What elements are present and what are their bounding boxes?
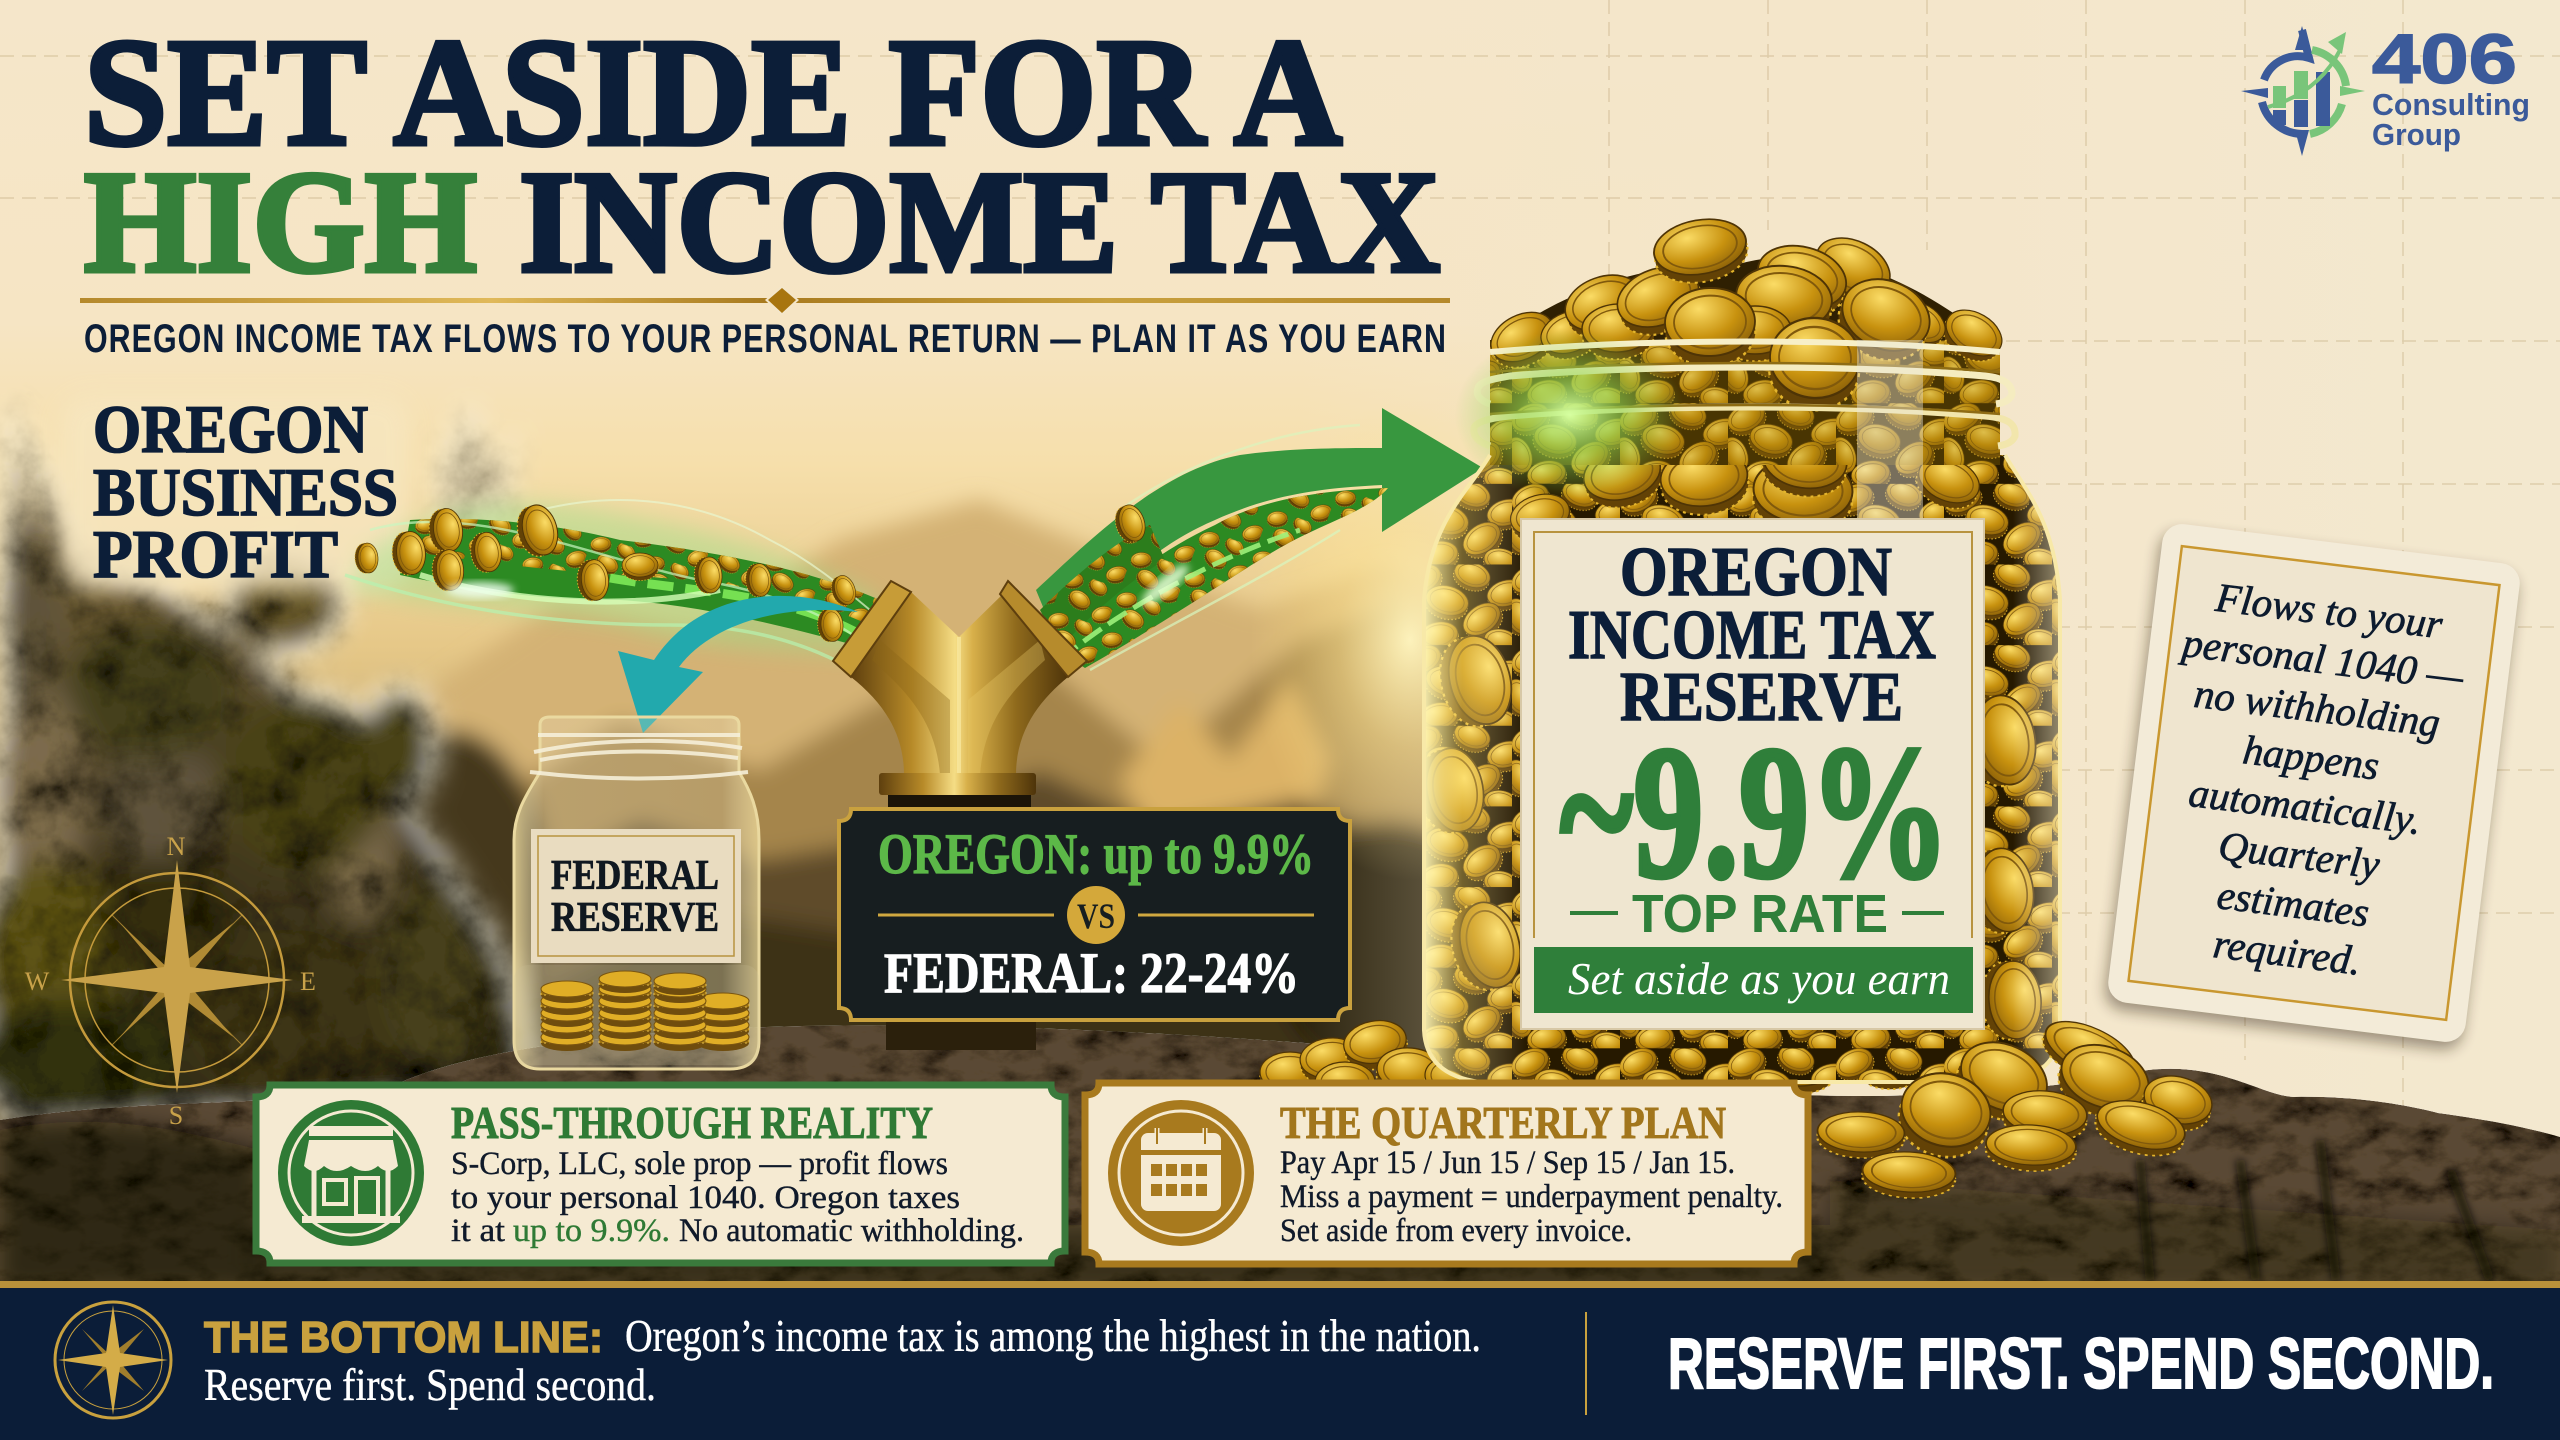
title: INCOME TAX [519, 141, 1440, 303]
Y pipe splitter [833, 581, 1087, 1050]
note card: flows to personal 1040: automatically. [2186, 769, 2424, 843]
arrow: green to Oregon jar [1036, 408, 1483, 670]
panel: pass-through reality [256, 1085, 1065, 1263]
compass rose: W [25, 967, 50, 996]
jar rim rings [1474, 342, 2015, 446]
federal jar label [531, 829, 741, 963]
bottom banner: THE BOTTOM LINE: [204, 1313, 603, 1362]
logo: 406 Consulting Group: 406 [2372, 20, 2517, 98]
jar neck [1490, 340, 2000, 465]
comparison panel: Oregon vs Federal: VS [1077, 896, 1115, 936]
Oregon jar label: INCOME TAX [1568, 597, 1936, 674]
money stream: business profit into pipe [345, 500, 880, 668]
panel: pass-through reality: No automatic withholding. [679, 1213, 1024, 1249]
note card: flows to personal 1040: no withholding [2192, 670, 2443, 746]
note card: flows to personal 1040: estimates [2215, 871, 2372, 935]
note card: flows to personal 1040: Quarterly [2216, 822, 2383, 888]
arrow: teal to federal jar [618, 596, 858, 733]
panel: the quarterly plan [1085, 1083, 1808, 1264]
base coins behind the big jar [1260, 1009, 2013, 1108]
comparison panel: Oregon vs Federal [839, 809, 1350, 1020]
federal jar coin stacks [541, 971, 749, 1051]
title [84, 8, 1440, 303]
icon: calendar [1108, 1100, 1254, 1246]
panel: pass-through reality: S-Corp, LLC, sole prop — profit flows [451, 1146, 948, 1182]
cream halo behind source label [60, 395, 410, 590]
background: parchment fade on the right [1300, 0, 2560, 1290]
top rate: TOP RATE [1632, 884, 1888, 944]
background: faint parchment grid [0, 0, 2560, 1120]
note card: flows to personal 1040: Flows to your [2212, 574, 2446, 647]
comparison panel: Oregon vs Federal: FEDERAL: 22-24% [884, 942, 1299, 1005]
title: SET ASIDE FOR A [84, 8, 1342, 178]
rocky ledge [0, 1025, 2560, 1290]
banner compass icon [55, 1302, 171, 1418]
bottom banner: Oregon’s income tax is among the highest in the nation. [625, 1311, 1481, 1361]
panel: the quarterly plan: Pay Apr 15 / Jun 15 / Sep 15 / Jan 15. [1280, 1145, 1735, 1181]
panel: pass-through reality: up to 9.9%. [513, 1213, 670, 1249]
federal jar label: FEDERAL [551, 853, 719, 899]
background: distant mountains [330, 500, 1520, 1100]
panel: the quarterly plan: THE QUARTERLY PLAN [1280, 1097, 1726, 1148]
coin pile above the rim [1483, 212, 2010, 413]
green banner: Set aside as you earn [1568, 953, 1950, 1004]
gold divider with diamond [80, 288, 1450, 313]
logo: 406 Consulting Group: Consulting [2372, 87, 2530, 122]
green banner [1534, 947, 1973, 1013]
compass rose: E [300, 967, 316, 996]
Oregon jar label [1521, 519, 1984, 1029]
logo compass mark [2241, 26, 2365, 156]
compass rose [25, 832, 316, 1130]
panel: pass-through reality: it at [451, 1213, 505, 1249]
rate figure: ~9.9% [1560, 708, 1950, 918]
note card: flows to personal 1040: personal 1040 — [2177, 619, 2467, 699]
source label: Oregon business profit: PROFIT [93, 516, 338, 592]
source label: Oregon business profit: BUSINESS [93, 454, 398, 530]
coin spill on the right [1817, 1010, 2217, 1200]
panel: the quarterly plan: Set aside from every invoice. [1280, 1213, 1632, 1249]
jar glass sheen [1857, 340, 1923, 520]
logo: 406 Consulting Group: Group [2372, 117, 2461, 152]
source label: Oregon business profit: OREGON [93, 391, 368, 467]
comparison panel: Oregon vs Federal: OREGON: up to 9.9% [878, 823, 1314, 886]
source label: Oregon business profit [93, 391, 398, 592]
background: sunlight glow by the jar [1250, 400, 1570, 880]
bottom banner [0, 1281, 2560, 1440]
Oregon jar label: RESERVE [1620, 659, 1903, 736]
panel: pass-through reality: PASS-THROUGH REALITY [451, 1097, 933, 1148]
panel: pass-through reality: to your personal 1040. Oregon taxes [451, 1180, 960, 1216]
note card: flows to personal 1040: happens [2240, 726, 2382, 789]
logo: 406 Consulting Group [2241, 20, 2530, 156]
compass rose: N [167, 832, 186, 861]
subtitle: OREGON INCOME TAX FLOWS TO YOUR PERSONAL RETURN — PLAN IT AS YOU EARN [84, 316, 1446, 361]
note card: flows to personal 1040: required. [2211, 920, 2364, 984]
Oregon jar label: OREGON [1620, 534, 1892, 611]
federal jar label: RESERVE [551, 895, 719, 941]
big Oregon jar [1412, 212, 2064, 1085]
federal reserve jar [514, 717, 759, 1069]
dark backing for coin pile [1495, 257, 1990, 345]
bottom banner: Reserve first. Spend second. [204, 1360, 656, 1410]
panel: the quarterly plan: Miss a payment = underpayment penalty. [1280, 1179, 1783, 1215]
jar coin fill [1412, 426, 2064, 1085]
title: HIGH [84, 141, 477, 303]
background: left forest and cliff [0, 400, 545, 1130]
note card: flows to personal 1040 [2103, 522, 2522, 1052]
icon: storefront [278, 1100, 424, 1246]
compass rose: S [169, 1101, 183, 1130]
